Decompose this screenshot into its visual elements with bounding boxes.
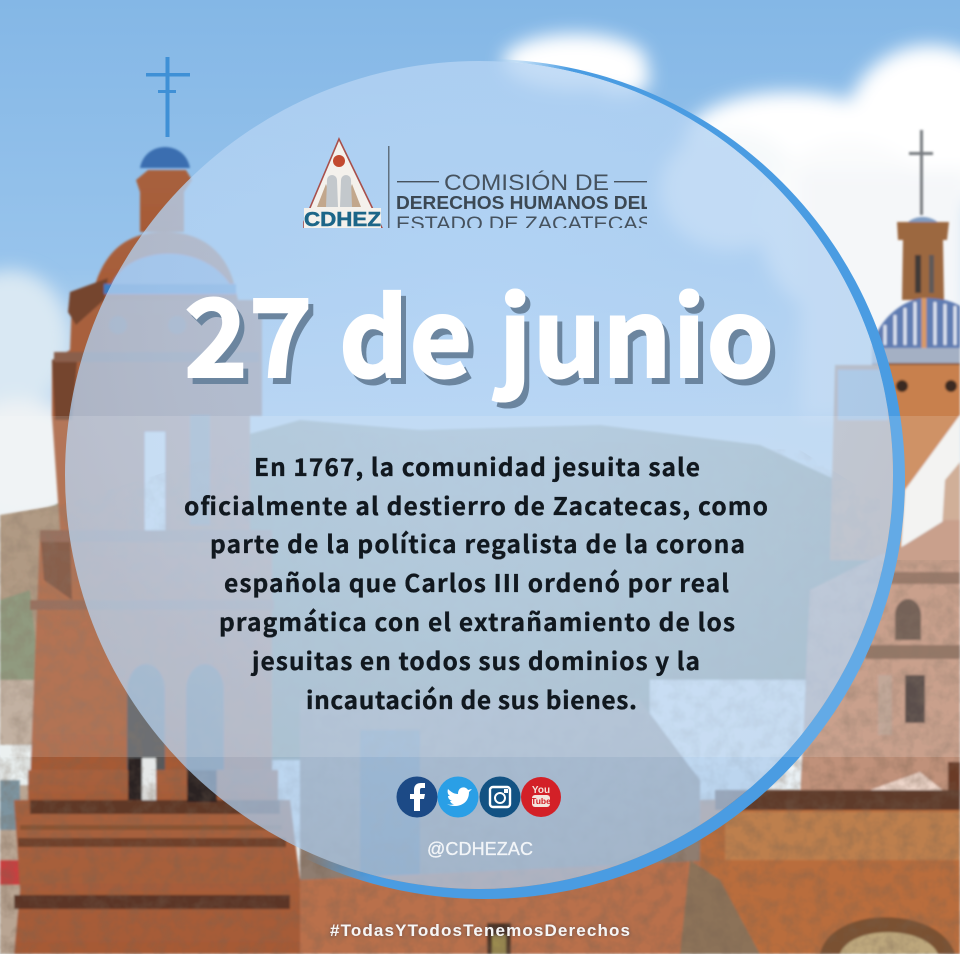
icon: instagram [480,776,520,818]
left tower dark cornice [40,278,108,600]
right church facade [800,520,960,800]
body text: En 1767, la comunidad jesuita sale [254,449,700,484]
right tower cross [909,130,933,215]
title: date: 27 de junio [184,253,774,409]
icon: youtube: You [532,785,550,796]
title: date: 27 de junio [189,259,779,415]
icon: facebook [396,776,438,818]
social handle: @CDHEZAC [427,839,533,859]
icon: twitter [438,776,478,818]
logo wordmark: COMISIÓN DE [444,170,609,195]
left tower body [14,170,300,954]
right dome tiles [872,298,960,350]
logo wordmark: ESTADO DE ZACATECAS [396,214,652,235]
logo [304,139,652,235]
icon: youtube [521,777,561,817]
hashtag: #TodasYTodosTenemosDerechos [330,921,630,940]
body text: jesuitas en todos sus dominios y la [250,643,700,678]
photo texture [0,420,960,954]
icon: youtube: Tube [531,796,551,806]
right lantern [903,217,943,232]
blue crescent ring [65,59,905,899]
body text: incautación de sus bienes. [306,682,637,717]
body text [184,449,768,717]
pale horizontal band [0,416,960,757]
logo emblem triangle [304,139,382,231]
logo wordmark: DERECHOS HUMANOS DEL [396,193,652,213]
right brick wall [700,792,960,954]
logo wordmark [397,170,647,228]
body text: parte de la política regalista de la corona [210,526,745,561]
body text: pragmática con el extrañamiento de los [219,604,735,639]
social media icons [396,776,561,818]
left lantern dome [140,147,190,168]
logo emblem triangle: CDHEZ [304,209,381,231]
cross on left tower [146,57,190,137]
body text: española que Carlos III ordenó por real [224,565,729,600]
translucent circle panel [65,61,893,889]
body text: oficialmente al destierro de Zacatecas, como [184,488,768,523]
logo divider [388,146,390,228]
left main dome tiles [110,254,232,288]
